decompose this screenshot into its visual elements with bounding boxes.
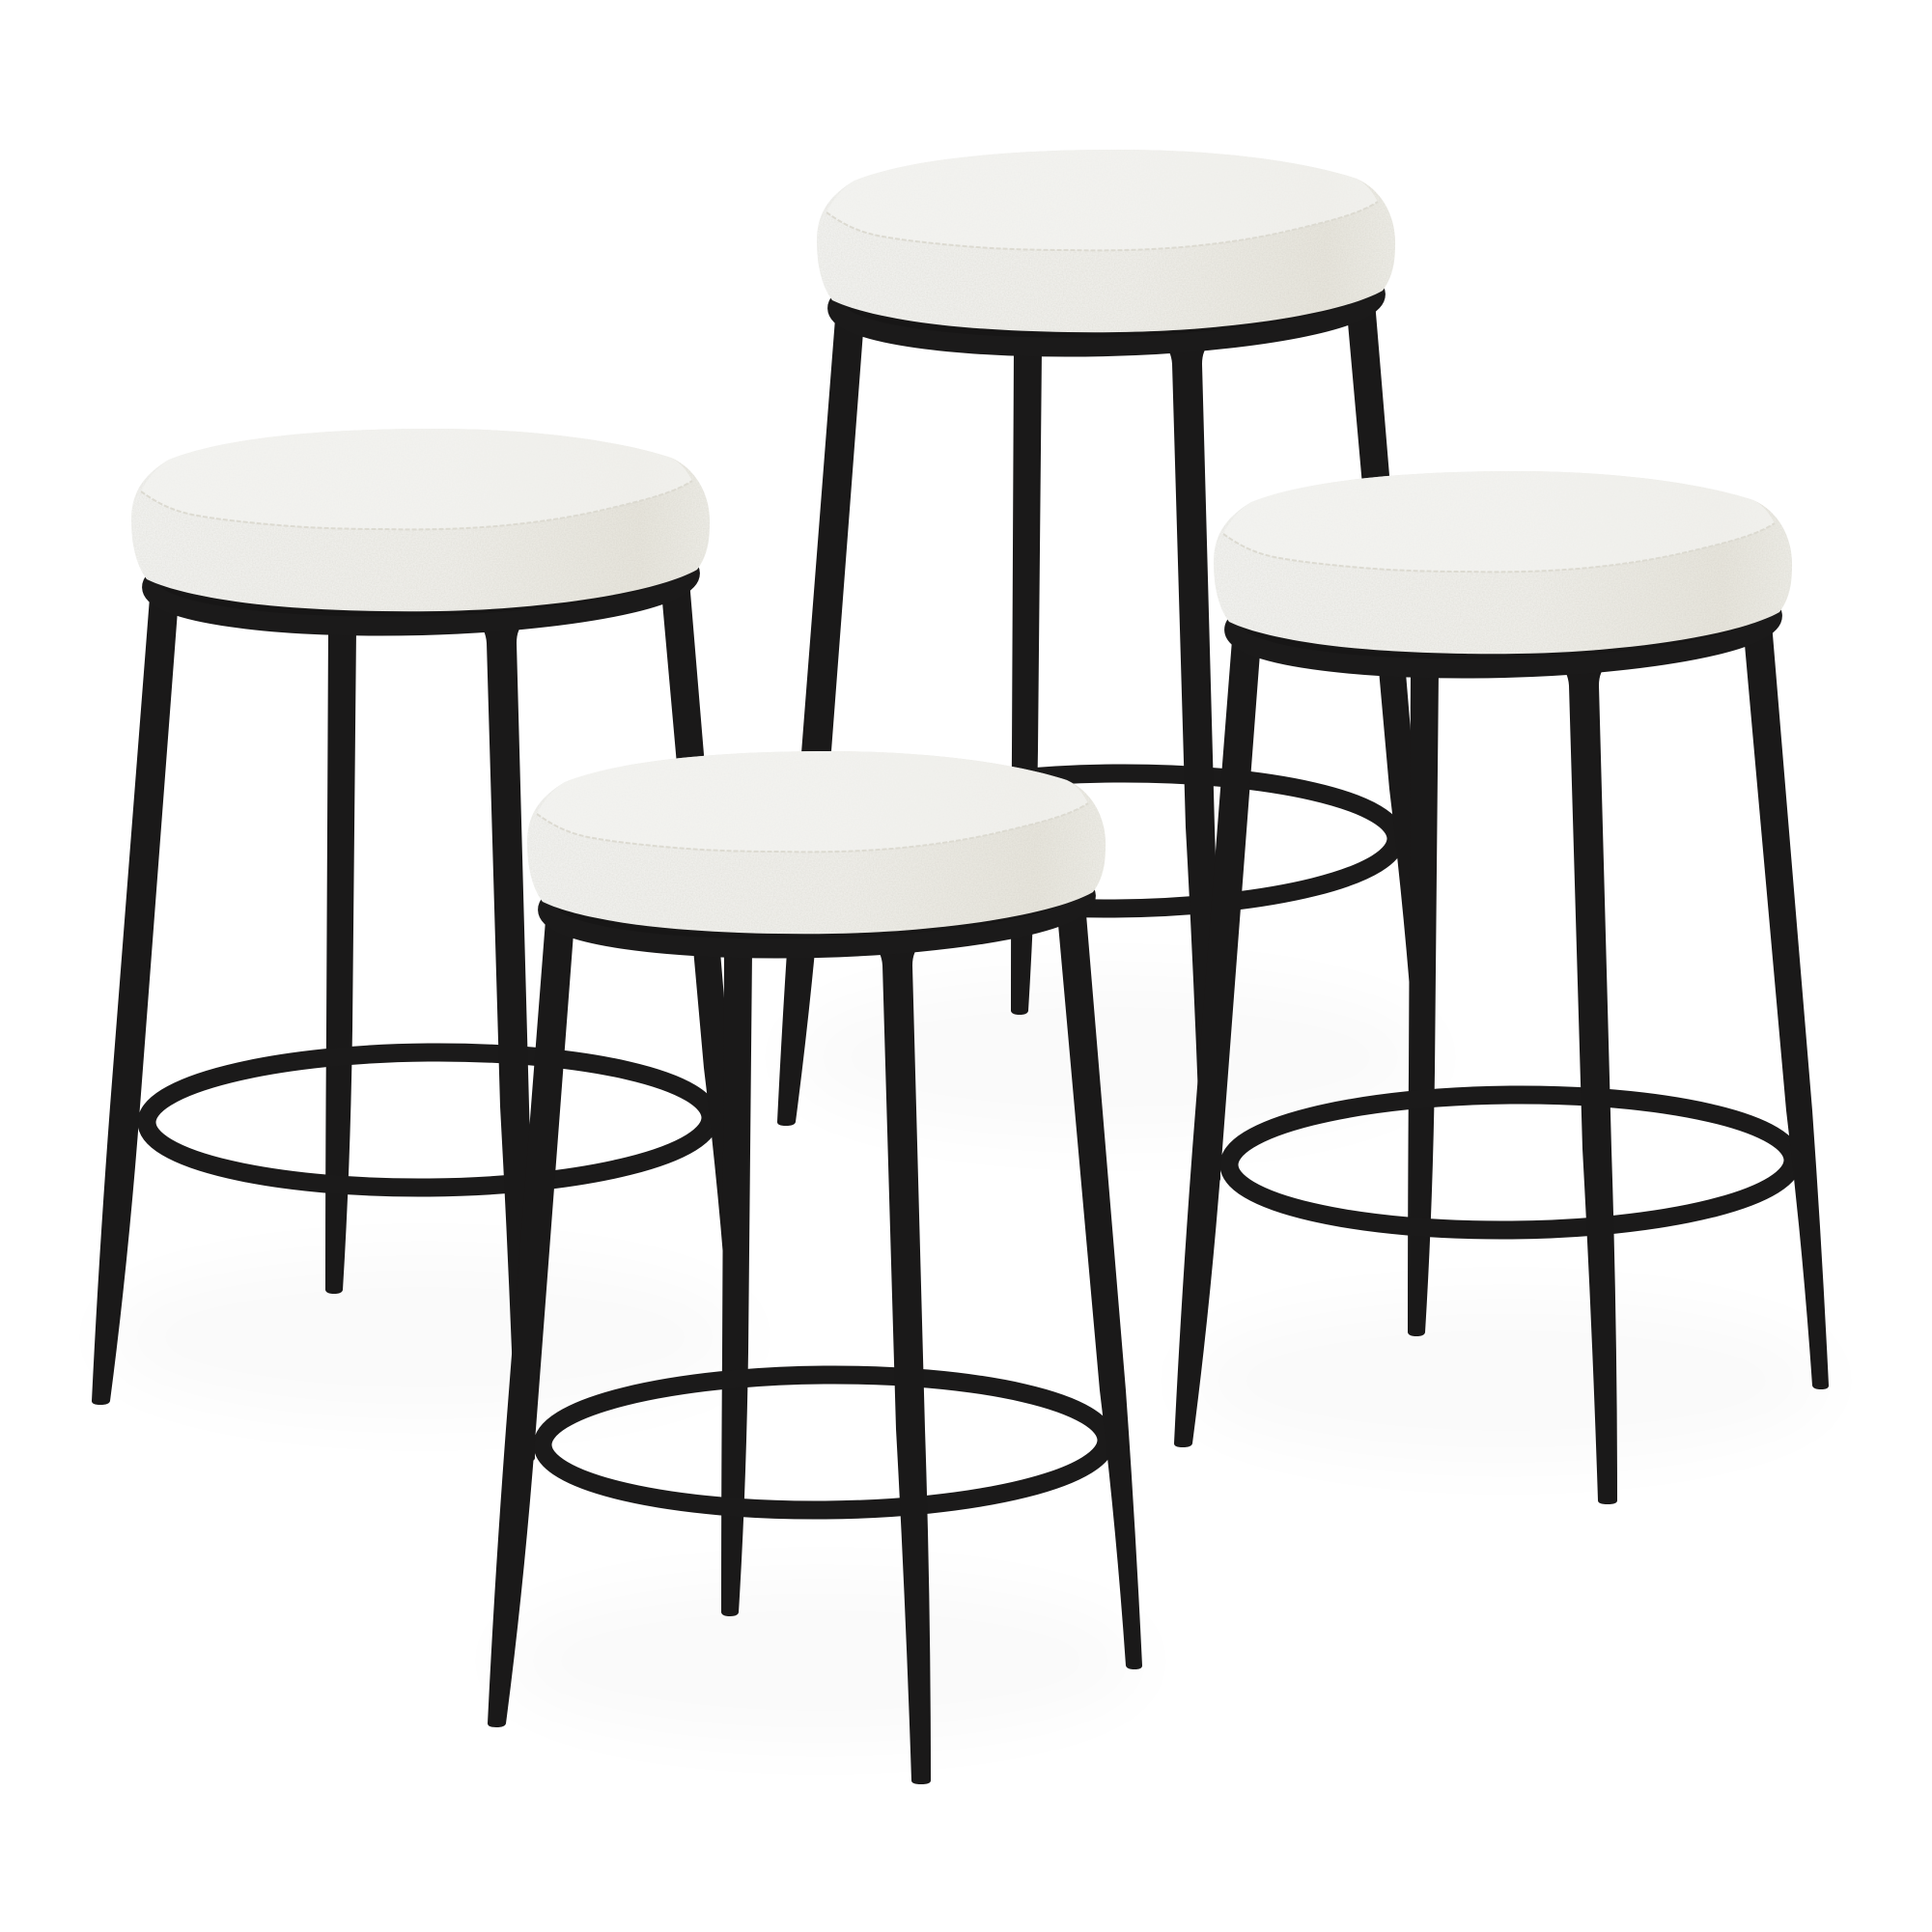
cushion (527, 751, 1106, 934)
left leg (777, 306, 865, 1126)
front leg (476, 622, 535, 1462)
stool: back left (92, 429, 746, 1462)
front leg (1558, 664, 1617, 1504)
foot ring (542, 1372, 1107, 1513)
left leg (1174, 628, 1262, 1447)
right leg (1743, 623, 1829, 1389)
right leg (1346, 301, 1432, 1068)
cushion (1214, 471, 1792, 654)
foot ring (1228, 1092, 1794, 1233)
back leg (1408, 671, 1439, 1336)
cushion (131, 429, 710, 611)
back leg (325, 629, 356, 1294)
back leg (721, 951, 752, 1616)
seat ring (546, 851, 1087, 955)
left leg (488, 908, 575, 1727)
floor shadows (97, 975, 1834, 1743)
cushion (817, 150, 1395, 332)
foot ring (831, 770, 1397, 911)
seat ring (836, 249, 1377, 353)
stool: front (488, 751, 1142, 1784)
foot ring (146, 1050, 712, 1190)
stool: right (1174, 471, 1829, 1504)
back leg (1011, 350, 1042, 1015)
right leg (660, 580, 746, 1347)
seat ring (1233, 571, 1774, 675)
stool: back centre (777, 150, 1432, 1183)
seat ring (151, 528, 691, 632)
front leg (1162, 343, 1220, 1183)
left leg (92, 585, 180, 1405)
front leg (872, 944, 931, 1784)
right leg (1056, 903, 1142, 1669)
